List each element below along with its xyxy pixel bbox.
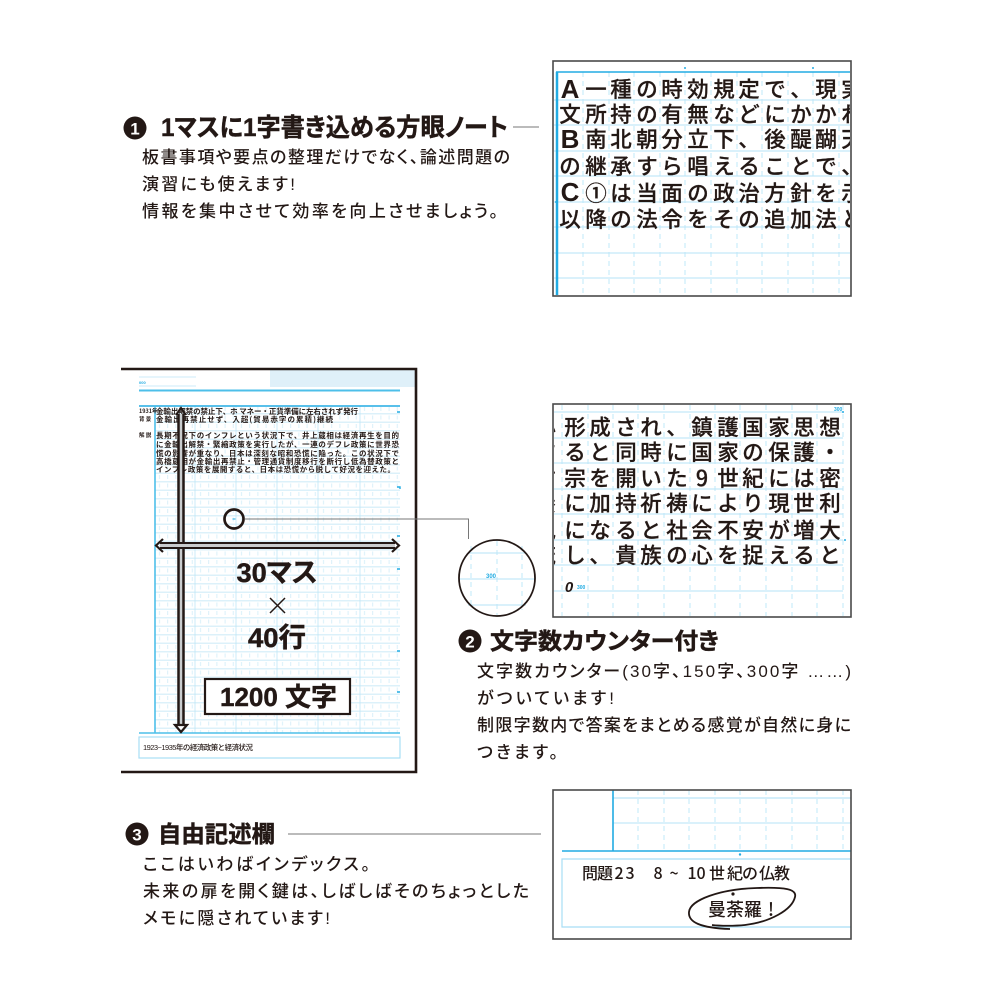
page grid: [139, 406, 400, 733]
header tint block: [270, 369, 416, 387]
panel: character counter sample: 言宗を開いた9世紀には密: [534, 462, 841, 493]
section 2: body text: 文字数カウンター(30字、150字、300字 ……): [477, 662, 851, 681]
panel: character counter sample: [534, 404, 851, 617]
panel: character counter sample: すると同時に国家の保護・: [534, 436, 841, 467]
section 2: body text: [477, 662, 851, 762]
footer memo box: 1923~1935年の経済政策と経済状況: [143, 742, 254, 752]
zoom circle with counter mark: 300: [486, 574, 497, 580]
section 2: heading: 2: [465, 632, 475, 652]
section 1: heading: 1: [130, 120, 140, 138]
panel: character counter sample: 流し、貴族の心を捉えると: [534, 539, 841, 570]
section 1: body text: 演習にも使えます!: [142, 175, 295, 194]
arrow: horizontal 30 squares: [156, 539, 399, 552]
panel: full notebook page: 000: [139, 380, 146, 385]
section 3: heading: 3: [132, 826, 142, 844]
zoom circle with counter mark: [459, 540, 535, 616]
label: multiply sign: [270, 598, 285, 613]
handwritten note text: [139, 406, 400, 475]
handwritten note text: 金輸出解禁の禁止下、ホ マネー・正貨準備に左右されず発行: [156, 406, 358, 417]
panel: notebook sample with handwriting: [553, 61, 863, 296]
panel: full notebook page: [121, 369, 416, 772]
panel: notebook sample with handwriting: 文所持の有無などにかかわ: [559, 98, 863, 129]
panel: character counter sample: 300: [834, 407, 843, 413]
section 3: body text: ここはいわばインデックス。: [143, 854, 370, 874]
handwritten note text: 1931年: [139, 407, 158, 415]
panel: notebook sample with handwriting: C: [561, 177, 580, 207]
label: 1200 characters box: 1200 文字: [220, 682, 337, 712]
section 1: heading: 1マスに1字書き込める方眼ノート: [161, 114, 508, 142]
label: 40 rows: 40行: [248, 623, 306, 653]
memo handwriting: 曼荼羅!: [708, 896, 774, 922]
section 3: heading: [126, 821, 541, 847]
panel: free memo field sample: [553, 790, 851, 939]
memo ellipse: [689, 888, 795, 929]
handwritten note text: 金輸出再禁止せず、入超(貿易赤字の累積)継続: [156, 414, 334, 425]
handwritten note text: 長期不況下のインフレという状況下で、井上蔵相は経済再生を目的: [156, 430, 400, 441]
handwritten note text: 慌の影響が重なり、日本は深刻な昭和恐慌に陥った。この状況下で: [156, 448, 400, 459]
handwritten note text: 背 景: [139, 415, 152, 423]
panel: character counter sample: 養に加持祈祷により現世利: [534, 487, 841, 518]
section 3: body text: [143, 854, 529, 928]
panel: notebook sample with handwriting: 南北朝分立下、後醍醐天: [585, 123, 863, 154]
panel: character counter sample: 心形成され、鎮護国家思想: [534, 411, 841, 442]
section 2: body text: 制限字数内で答案をまとめる感覚が自然に身に: [477, 715, 851, 735]
section 2: body text: がついています!: [477, 688, 614, 708]
magnifier marker circle: [224, 510, 244, 528]
panel: free memo field sample: 問題238~10世紀の仏教: [582, 860, 790, 884]
section 3: body text: 未来の扉を開く鍵は、しばしばそのちょっとした: [143, 882, 529, 901]
handwritten note text: 高橋蔵相が金輸出再禁止・管理通貨制度移行を断行し低為替政策と: [156, 456, 399, 467]
panel: notebook sample with handwriting: の継承すら唱えることで、: [559, 150, 863, 181]
panel: notebook sample with handwriting: A: [561, 74, 580, 104]
panel: notebook sample with handwriting: 一種の時効規定で、現実: [585, 73, 863, 104]
handwritten note text: 解 説: [139, 431, 152, 439]
section 1: body text: [142, 148, 510, 221]
panel: character counter sample: 0: [565, 579, 574, 596]
section 1: body text: 板書事項や要点の整理だけでなく、論述問題の: [142, 148, 510, 167]
arrow: vertical 40 rows: [175, 408, 187, 732]
section 2: heading: 文字数カウンター付き: [490, 628, 719, 654]
section 1: body text: 情報を集中させて効率を向上させましょう。: [142, 202, 498, 221]
handwritten note text: インフレ政策を展開すると、日本は恐慌から脱して好況を迎えた。: [156, 464, 395, 475]
section 2: body text: つきます。: [477, 743, 558, 762]
panel: notebook sample with handwriting: 以降の法令をその追加法と: [559, 203, 863, 234]
section 3: body text: メモに隠されています!: [143, 909, 330, 928]
handwritten note text: に金輸出解禁・緊縮政策を実行したが、一連のデフレ政策に世界恐: [156, 439, 400, 450]
label: 1200 characters box: [205, 679, 350, 714]
panel: character counter sample: 紀になると社会不安が増大: [534, 514, 841, 545]
section 3: heading: 自由記述欄: [158, 821, 275, 847]
label: 30 squares: 30マス: [236, 558, 318, 588]
panel: notebook sample with handwriting: ①は当面の政治方針を示: [585, 177, 863, 208]
panel: character counter sample: 300: [577, 585, 586, 591]
footer memo box: [139, 737, 400, 758]
connector line to zoom circle: [245, 519, 468, 539]
panel: notebook sample with handwriting: B: [561, 124, 579, 154]
